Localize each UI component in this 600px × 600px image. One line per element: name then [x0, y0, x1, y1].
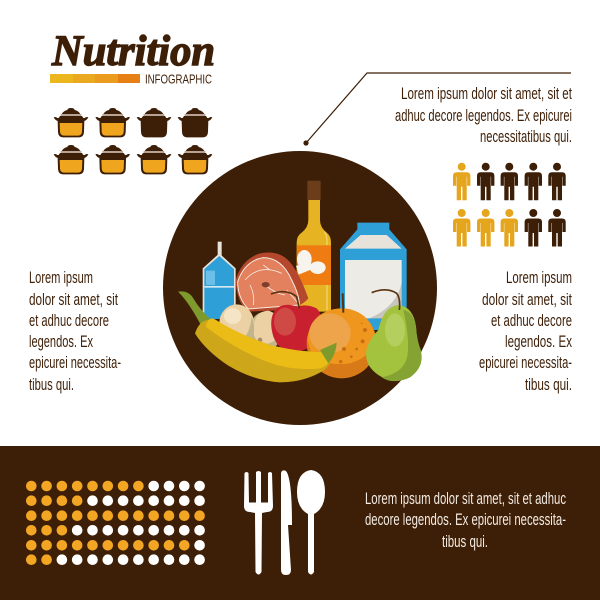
orange — [307, 293, 377, 378]
banana — [178, 291, 337, 382]
text block: right: Lorem ipsum — [506, 269, 572, 287]
food illustration — [178, 181, 422, 382]
bottom band — [0, 446, 600, 600]
leader line callout — [303, 73, 571, 146]
text block: left: et adhuc decore — [29, 312, 109, 330]
central circle — [163, 151, 437, 425]
apple — [271, 292, 321, 352]
pear — [366, 290, 422, 381]
title: Nutrition — [51, 28, 215, 75]
text block: left: epicurei necessita- — [29, 354, 121, 372]
colour bar — [50, 74, 140, 83]
cutlery icons — [244, 470, 325, 575]
text block: left: tibus qui. — [29, 376, 74, 394]
text block: left: dolor sit amet, sit — [29, 291, 118, 309]
subtitle: INFOGRAPHIC — [145, 72, 212, 86]
meat — [236, 252, 308, 312]
icon: spoon — [297, 470, 325, 574]
milk carton small — [203, 242, 236, 319]
pot icons — [54, 108, 212, 174]
icon: fork — [244, 471, 273, 574]
text block: right — [479, 269, 573, 394]
text block: right: legendos. Ex — [505, 333, 573, 351]
icon: knife — [281, 470, 292, 575]
text block: left — [29, 269, 121, 394]
milk carton large — [340, 223, 407, 330]
text block: left: Lorem ipsum — [29, 269, 93, 287]
bottle — [297, 181, 331, 312]
text block: top right — [395, 85, 572, 146]
dot matrix chart — [26, 481, 205, 565]
text block: bottom — [365, 490, 566, 551]
people icons — [453, 163, 566, 246]
meat bone — [296, 250, 326, 275]
potatoes — [219, 304, 282, 352]
text block: right: tibus qui. — [525, 376, 572, 394]
text block: left: legendos. Ex — [29, 333, 93, 351]
title block — [50, 28, 215, 86]
text block: bottom: tibus qui. — [442, 533, 488, 551]
